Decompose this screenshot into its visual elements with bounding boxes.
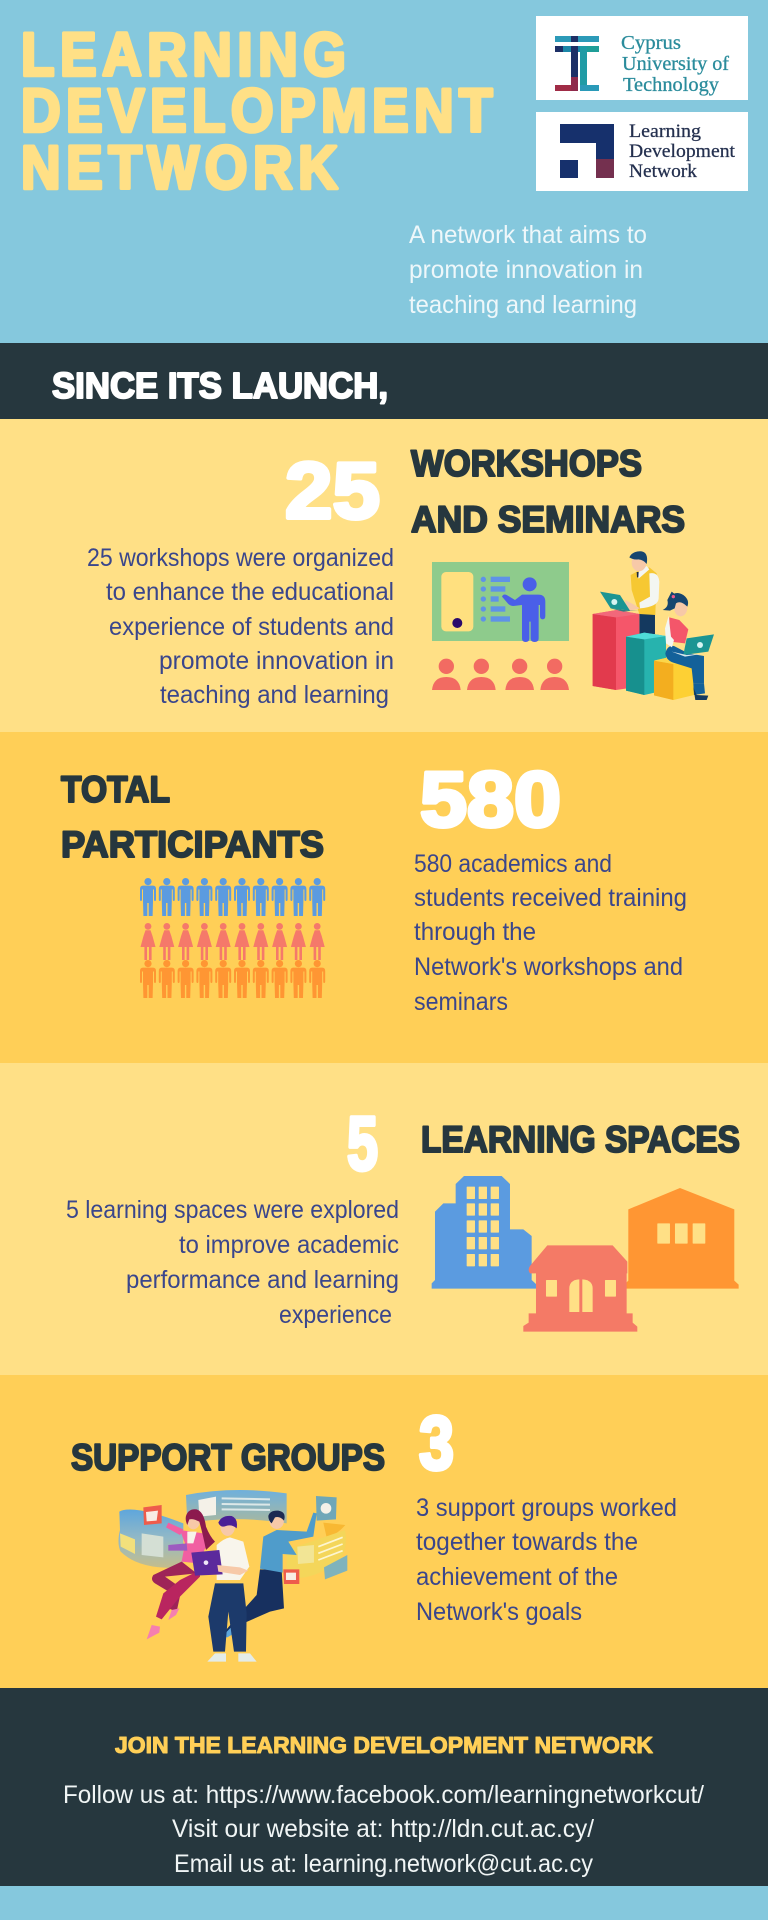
text: support groups description: together towards the [416, 1528, 638, 1556]
text: participants description: students received training [414, 884, 687, 912]
text: learning spaces description: to improve academic [179, 1231, 399, 1259]
panel: learning spaces [0, 1063, 768, 1375]
tagline: promote innovation in [409, 256, 643, 284]
logo: Learning Development Network: Learning [629, 121, 702, 142]
text: workshops description: 25 workshops were organized [87, 544, 394, 572]
text: participants description: seminars [414, 988, 508, 1016]
number: 5: 5 [347, 1102, 378, 1187]
panel: total participants [0, 732, 768, 1063]
panel: footer [0, 1688, 768, 1886]
text: contact details [63, 1781, 704, 1878]
text: learning spaces description: performance and learning [126, 1266, 399, 1294]
heading: total participants [61, 769, 324, 865]
illustration: colleagues with laptops on bar chart [593, 551, 714, 700]
text: contact details: Visit our website at: http://ldn.cut.ac.cy/ [172, 1815, 594, 1843]
text: workshops description: experience of students and [109, 613, 394, 641]
tagline: A network that aims to [409, 221, 647, 249]
heading: total participants: PARTICIPANTS [61, 824, 324, 865]
text: support groups description: Network's goals [416, 1598, 582, 1626]
heading: support groups: SUPPORT GROUPS [71, 1437, 385, 1478]
tagline: teaching and learning [409, 291, 637, 319]
icon: rows of people pictogram [140, 878, 325, 998]
logo: Cyprus University of Technology: Technology [623, 74, 719, 96]
text: workshops description [87, 544, 394, 709]
illustration: team with floating screens [118, 1490, 347, 1662]
text: participants description: through the [414, 918, 536, 946]
text: contact details: Email us at: learning.network@cut.ac.cy [174, 1850, 593, 1878]
logo: Cyprus University of Technology: University of [622, 53, 729, 75]
title: DEVELOPMENT [21, 77, 493, 145]
tagline [409, 221, 647, 319]
panel: support groups [0, 1375, 768, 1688]
icon: campus buildings [432, 1176, 739, 1332]
text: workshops description: to enhance the educational [106, 578, 394, 606]
number: 25: 25 [285, 446, 380, 535]
logo: Learning Development Network [536, 112, 748, 191]
logo: Cyprus University of Technology [536, 16, 748, 100]
heading: workshops and seminars [411, 443, 685, 540]
logo: Cyprus University of Technology: Cyprus [621, 32, 681, 54]
text: participants description: Network's workshops and [414, 953, 683, 981]
number: 3: 3 [419, 1401, 454, 1486]
panel: workshops and seminars [0, 419, 768, 732]
text: learning spaces description: experience [279, 1301, 392, 1329]
text: support groups description [416, 1494, 677, 1626]
text: contact details: Follow us at: https://www.facebook.com/learningnetworkcut/ [63, 1781, 704, 1809]
text: participants description: 580 academics and [414, 850, 612, 878]
text: learning spaces description [66, 1196, 399, 1329]
text: support groups description: 3 support groups worked [416, 1494, 677, 1522]
heading: learning spaces: LEARNING SPACES [421, 1119, 740, 1160]
icon: teacher presenting to audience [432, 562, 569, 690]
heading: total participants: TOTAL [61, 769, 170, 810]
text: learning spaces description: 5 learning spaces were explored [66, 1196, 399, 1224]
text: participants description [414, 850, 687, 1016]
title [21, 21, 493, 202]
heading: since its launch: SINCE ITS LAUNCH, [52, 365, 388, 406]
text: workshops description: teaching and learning [160, 681, 389, 709]
heading: join the network: JOIN THE LEARNING DEVELOPMENT NETWORK [115, 1732, 653, 1758]
heading: workshops and seminars: AND SEMINARS [411, 499, 685, 540]
title: LEARNING [21, 21, 346, 89]
panel: since its launch band [0, 343, 768, 419]
text: workshops description: promote innovation in [159, 647, 394, 675]
text: support groups description: achievement of the [416, 1563, 618, 1591]
heading: workshops and seminars: WORKSHOPS [411, 443, 642, 484]
logo: Learning Development Network: Development [629, 141, 736, 162]
number: 580: 580 [420, 755, 561, 843]
title: NETWORK [21, 134, 338, 202]
panel: header [0, 0, 768, 343]
logo: Learning Development Network: Network [629, 161, 698, 182]
